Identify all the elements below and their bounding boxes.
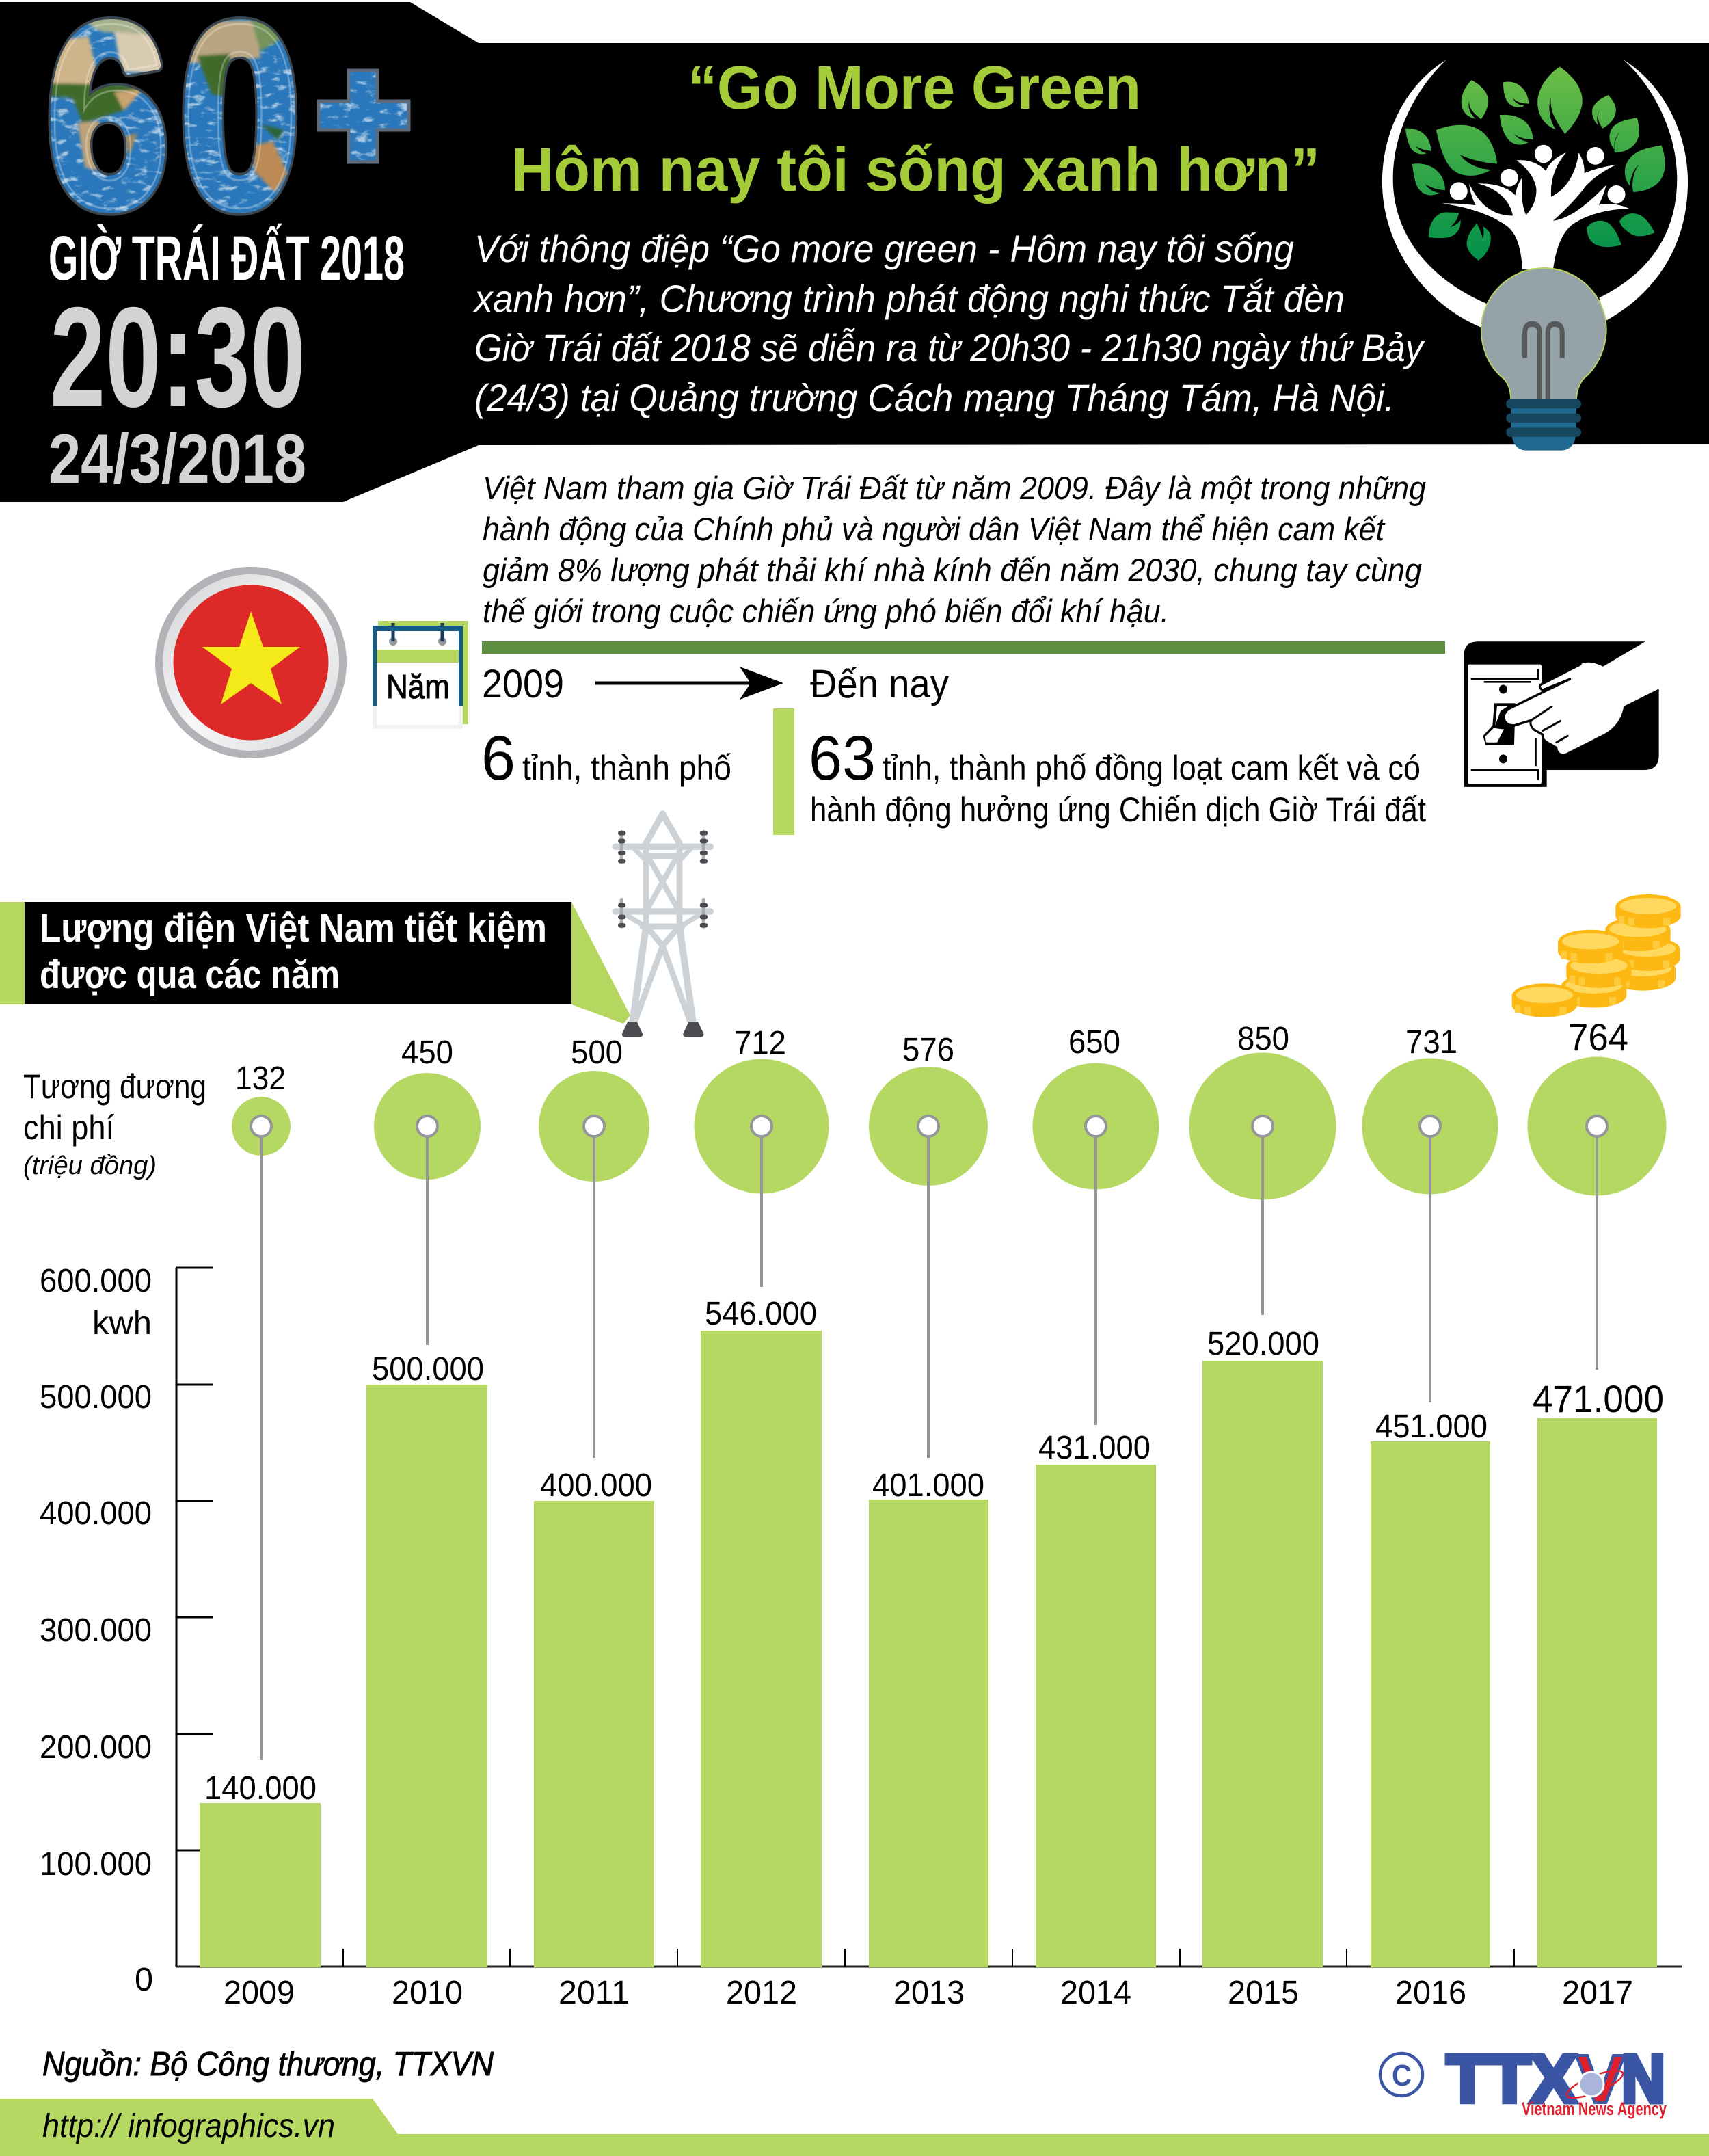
cost bubbles: 132 [235,1061,286,1097]
icon: Vietnam flag badge [155,567,347,758]
commitment paragraph [483,470,1426,629]
section heading [0,902,630,1024]
bar chart [176,1296,1682,2011]
bar chart: 2014 [1060,1975,1131,2011]
y axis: 200.000 [40,1729,152,1766]
event date: 24/3/2018 [49,420,306,498]
cost legend label [23,1067,206,1180]
event time: 20:30 [50,278,306,437]
cost bubbles: 450 [401,1035,453,1071]
slogan heading: “Go More Green [688,54,1141,122]
bar chart: 2011 [559,1975,630,2011]
intro text: Với thông điệp “Go more green - Hôm nay tôi sống [474,227,1294,270]
bar chart: 546.000 [705,1296,817,1332]
section heading: được qua các năm [40,953,340,997]
commitment paragraph: thế giới trong cuộc chiến ứng phó biến đổi khí hậu. [483,593,1169,629]
slogan heading [511,54,1320,204]
bar chart: 140.000 [204,1770,317,1807]
y axis: 100.000 [40,1846,152,1882]
icon: tree in light bulb [1382,59,1688,451]
cost bubbles: 731 [1405,1024,1457,1061]
bar chart: 2012 [726,1975,797,2011]
intro text: Giờ Trái đất 2018 sẽ diễn ra từ 20h30 - 21h30 ngày thứ Bảy [474,326,1425,369]
cost legend label: (triệu đồng) [23,1152,157,1180]
divider bar [482,641,1445,654]
stat: 6 provinces: 6 [481,723,515,793]
intro text [472,227,1425,419]
footer band [0,2099,1709,2156]
intro text: xanh hơn”, Chương trình phát động nghi thức Tắt đèn [472,277,1345,320]
cost legend label: Tương đương [23,1067,206,1106]
TTXVN logo [1380,2041,1667,2119]
source: Nguồn: Bộ Công thương, TTXVN [42,2046,494,2083]
cost bubbles: 650 [1068,1024,1120,1061]
cost bubbles: 764 [1568,1015,1628,1059]
icon: calendar [373,621,468,729]
cost bubbles [232,1015,1667,1760]
stat: 63 provinces: tỉnh, thành phố đồng loạt cam kết và có [883,749,1421,787]
label: until now: Đến nay [810,662,949,706]
TTXVN logo: C [1392,2059,1412,2092]
green accent bar [773,708,794,835]
stat: 63 provinces [809,723,1426,829]
cost bubbles: 712 [734,1025,786,1061]
intro text: (24/3) tại Quảng trường Cách mạng Tháng Tám, Hà Nội. [474,376,1395,419]
bar chart: 2017 [1562,1975,1633,2011]
bar chart: 2015 [1228,1975,1299,2011]
cost legend label: chi phí [23,1108,114,1147]
bar chart: 401.000 [872,1467,984,1504]
bar chart: 400.000 [540,1467,652,1504]
bar chart: 2010 [392,1975,463,2011]
y axis: 500.000 [40,1379,152,1415]
bar chart: 2013 [893,1975,965,2011]
y axis: 0 [135,1962,153,1998]
stat: 63 provinces: 63 [809,723,876,793]
y axis: 400.000 [40,1495,152,1532]
icon: hand on switch [1464,640,1663,787]
bar chart: 500.000 [372,1351,484,1387]
bar chart: 520.000 [1207,1326,1319,1362]
bar chart: 2009 [224,1975,295,2011]
year 2009: 2009 [482,662,564,706]
bar chart: 431.000 [1038,1430,1150,1466]
header black panel [0,2,1709,502]
bar chart: 451.000 [1375,1409,1488,1445]
y axis: 300.000 [40,1612,152,1649]
icon: gold coins [1512,894,1681,1017]
TTXVN logo: V [1576,2041,1625,2118]
arrow [595,667,783,700]
icon: power tower [615,814,710,1037]
y axis [40,1263,213,1998]
section heading: Lượng điện Việt Nam tiết kiệm [40,906,547,950]
commitment paragraph: giảm 8% lượng phát thải khí nhà kính đến năm 2030, chung tay cùng [483,552,1422,588]
cost bubbles: 500 [571,1035,623,1071]
cost bubbles: 850 [1237,1021,1289,1057]
commitment paragraph: Việt Nam tham gia Giờ Trái Đất từ năm 2009. Đây là một trong những [483,470,1426,506]
stat: 6 provinces: tỉnh, thành phố [522,749,731,787]
stat: 6 provinces [481,723,731,793]
event name: GIỜ TRÁI ĐẤT 2018 [49,223,405,293]
icon: calendar: Năm [386,669,450,706]
stat: 63 provinces: hành động hưởng ứng Chiến dịch Giờ Trái đất [810,790,1426,829]
y axis: kwh [92,1305,152,1342]
website url: http:// infographics.vn [42,2108,335,2144]
60+ globe logo [46,0,409,261]
y axis: 600.000 [40,1263,152,1299]
TTXVN logo: N [1621,2041,1665,2116]
slogan heading: Hôm nay tôi sống xanh hơn” [511,136,1320,204]
TTXVN logo: TTX [1446,2041,1576,2116]
bar chart: 2016 [1395,1975,1466,2011]
commitment paragraph: hành động của Chính phủ và người dân Việt Nam thể hiện cam kết [483,511,1386,547]
cost bubbles: 576 [902,1032,954,1068]
bar chart: 471.000 [1533,1377,1664,1420]
